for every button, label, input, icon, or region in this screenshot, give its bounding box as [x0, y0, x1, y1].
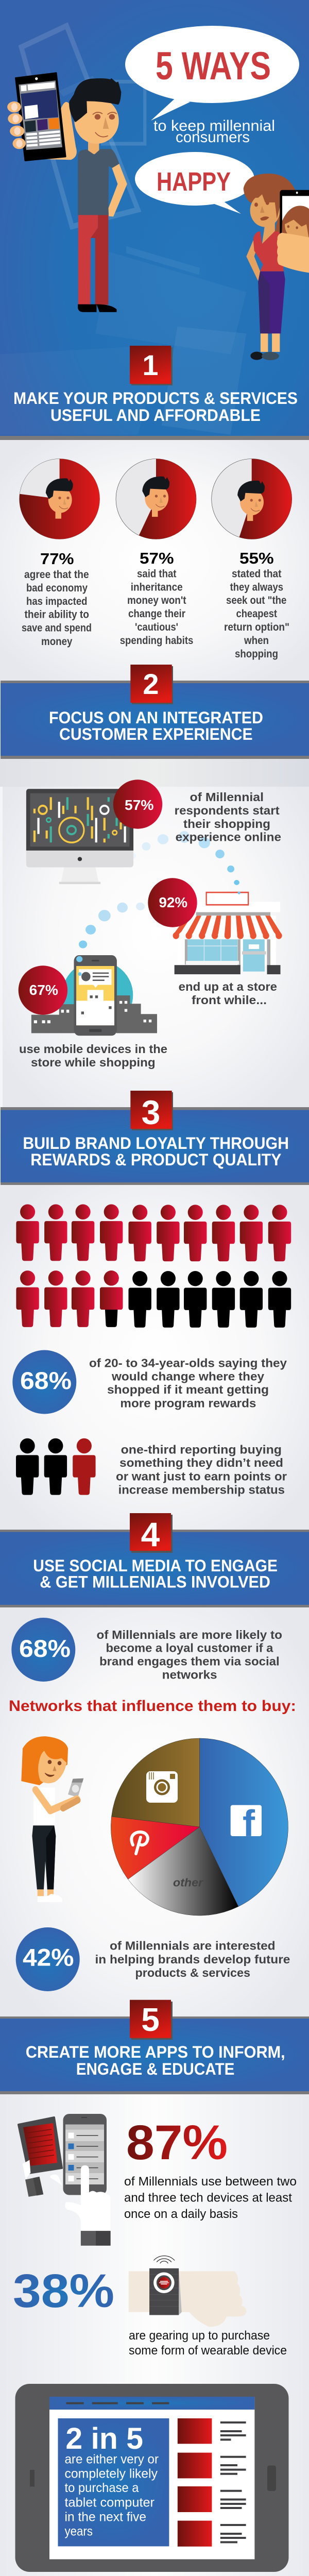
- text block: future products: [95, 1939, 290, 1979]
- stat circle: 57%: [113, 779, 162, 829]
- heading: step 1: USEFUL AND AFFORDABLE: [50, 406, 261, 425]
- text block: program rewards: of 20- to 34-year-olds saying they: [89, 1357, 287, 1370]
- stat circle: 42%: 42%: [23, 1944, 74, 1971]
- panel: step 2 customer journey: [0, 759, 309, 1107]
- text block: loyal customer: networks: [162, 1668, 217, 1682]
- text block: 77%: 77%: [40, 550, 74, 568]
- text block: 77%: [22, 550, 92, 648]
- text block: one-third: [116, 1443, 287, 1496]
- text block: 55%: [224, 549, 289, 660]
- badge: number 4: [130, 1513, 173, 1553]
- text block: tech devices: [124, 2175, 297, 2221]
- text block: one-third: or want just to earn points or: [116, 1470, 287, 1483]
- badge: number 5: [130, 2000, 173, 2040]
- text block: 55%: 55%: [239, 549, 274, 567]
- text block: program rewards: [89, 1357, 287, 1410]
- heading: step 5: ENGAGE & EDUCATE: [76, 2060, 234, 2078]
- heading: step 5: CREATE MORE APPS TO INFORM,: [26, 2043, 285, 2061]
- text block: tech devices: and three tech devices at least: [124, 2191, 292, 2205]
- text block: shopping online: experience online: [176, 831, 281, 844]
- text block: mobile devices: store while shopping: [31, 1056, 156, 1069]
- callout: 2 in 5: completely likely: [65, 2466, 158, 2481]
- text block: wearable device: are gearing up to purchase: [129, 2329, 270, 2343]
- illustration: smart watch on wrist: [129, 2256, 246, 2327]
- text block: 57%: 'cautious': [135, 621, 178, 633]
- statistic: 38%: 38%: [13, 2265, 114, 2317]
- heading: step 4: [33, 1556, 278, 1591]
- text block: one-third: something they didn’t need: [119, 1456, 283, 1469]
- text block: 77%: bad economy: [26, 582, 88, 594]
- speech bubble: happy: [135, 152, 254, 214]
- text block: shopping online: respondents start: [175, 804, 280, 817]
- heading: step 2: [49, 708, 263, 743]
- text block: 57%: change their: [128, 608, 185, 620]
- speech bubble: happy: HAPPY: [157, 167, 231, 196]
- text block: future products: products & services: [135, 1966, 250, 1979]
- pictogram: one third of people: [16, 1438, 96, 1495]
- icon: facebook: [231, 1803, 262, 1844]
- text block: 57%: inheritance: [131, 581, 183, 593]
- speech bubble: 5 ways: [125, 26, 299, 121]
- text block: 77%: their ability to: [25, 609, 89, 621]
- callout: 2 in 5: in the next five: [65, 2510, 146, 2524]
- stat circle: 68% rewards: 68%: [20, 1367, 72, 1394]
- panel: step 5 header: [0, 2000, 309, 2094]
- stat circle: 92%: 92%: [159, 894, 187, 910]
- text block: loyal customer: become a loyal customer if a: [106, 1641, 273, 1655]
- heading: step 3: BUILD BRAND LOYALTY THROUGH: [23, 1134, 289, 1153]
- text block: mobile devices: [19, 1042, 167, 1069]
- text block: shopping online: of Millennial: [190, 790, 264, 804]
- text block: 55%: seek out "the: [226, 595, 286, 606]
- subtitle: [153, 117, 275, 146]
- badge: number 1: 1: [142, 349, 159, 381]
- text block: program rewards: would change where they: [111, 1369, 264, 1383]
- heading: step 3: [23, 1134, 289, 1169]
- text block: loyal customer: of Millennials are more likely to: [97, 1628, 282, 1641]
- subtitle: consumers: [176, 129, 250, 146]
- text block: 55%: when: [244, 635, 269, 647]
- stat circle: 42%: [16, 1927, 80, 1991]
- icon: pinterest: [131, 1832, 148, 1854]
- text block: 57%: money won't: [127, 595, 186, 606]
- icon: desktop monitor: [26, 789, 133, 884]
- stat circle: 67%: 67%: [29, 982, 58, 998]
- illustration: tablet and phone with hands: [19, 2114, 111, 2246]
- stat circle: 92%: [148, 878, 197, 927]
- icon: instagram: [146, 1771, 178, 1803]
- text block: loyal customer: [97, 1628, 282, 1682]
- text block: shopping online: [175, 790, 281, 844]
- panel: step 3 loyalty statistics: [0, 1185, 309, 1530]
- text block: tech devices: of Millennials use between two: [124, 2175, 297, 2189]
- stat circle: 68% loyal: [11, 1618, 75, 1682]
- icon: mobile phone in city: [31, 955, 157, 1036]
- stat circle: 68% loyal: 68%: [19, 1635, 71, 1662]
- text block: mobile devices: use mobile devices in the: [19, 1042, 167, 1056]
- callout: 2 in 5: [58, 2418, 169, 2546]
- heading: step 2: FOCUS ON AN INTEGRATED: [49, 708, 263, 727]
- pictogram: 14 of 20 people: [16, 1205, 291, 1328]
- stat circle: 57%: 57%: [125, 797, 154, 813]
- pie chart: 77%: [20, 459, 100, 539]
- text block: 55%: return option": [224, 621, 289, 633]
- text block: 55%: stated that: [232, 568, 281, 580]
- text block: program rewards: more program rewards: [120, 1397, 256, 1410]
- badge: number 5: 5: [141, 2001, 160, 2038]
- text block: program rewards: shopped if it meant getting: [107, 1383, 269, 1396]
- text block: wearable device: some form of wearable device: [129, 2344, 287, 2358]
- badge: number 4: 4: [141, 1515, 160, 1553]
- panel: step 3 header: [1, 1091, 309, 1185]
- text block: wearable device: [129, 2329, 287, 2358]
- text block: loyal customer: brand engages them via social: [99, 1655, 280, 1668]
- text block: 57%: 57%: [140, 549, 174, 567]
- heading: step 4: USE SOCIAL MEDIA TO ENGAGE: [33, 1556, 278, 1575]
- badge: number 3: 3: [142, 1093, 160, 1131]
- icon: store front: [173, 891, 282, 974]
- panel: step 1 statistics: [0, 440, 309, 681]
- panel: step 5 apps statistics: [0, 2094, 309, 2576]
- badge: number 3: [130, 1091, 173, 1131]
- text block: store front: front while...: [192, 993, 267, 1007]
- illustration: tablet callout: [15, 2384, 288, 2572]
- pie chart: 57%: [116, 459, 196, 539]
- text block: 77%: has impacted: [26, 596, 88, 607]
- panel: step 4 header: [0, 1513, 309, 1607]
- heading: step 3: REWARDS & PRODUCT QUALITY: [30, 1150, 282, 1169]
- heading: step 4: & GET MILLENIALS INVOLVED: [40, 1573, 270, 1591]
- text block: 57%: said that: [137, 568, 176, 580]
- statistic: 87%: 87%: [126, 2115, 228, 2170]
- text block: one-third: increase membership status: [118, 1483, 285, 1496]
- badge: number 2: [130, 665, 173, 704]
- label: other: other: [173, 1876, 204, 1889]
- text block: 57%: spending habits: [120, 635, 193, 647]
- panel: hero header: [0, 0, 309, 436]
- panel: step 2 header: [1, 665, 309, 759]
- text block: store front: end up at a store: [179, 980, 277, 993]
- illustration: woman taking selfie: [244, 174, 309, 360]
- callout: 2 in 5: to purchase a: [65, 2481, 139, 2495]
- speech bubble: 5 ways: 5 WAYS: [156, 44, 271, 88]
- text block: 55%: shopping: [235, 648, 278, 660]
- heading: step 2: CUSTOMER EXPERIENCE: [59, 725, 253, 743]
- callout: 2 in 5: tablet computer: [65, 2496, 154, 2510]
- icon: facebook: f: [243, 1803, 255, 1844]
- badge: number 1: [130, 346, 173, 385]
- heading: step 1: [13, 389, 298, 425]
- callout: 2 in 5: years: [65, 2524, 93, 2539]
- dotted path: online to store: [130, 831, 239, 885]
- illustration: woman with phone: [21, 1736, 83, 1902]
- stat circle: 67%: [19, 965, 67, 1015]
- text block: 77%: agree that the: [24, 569, 89, 581]
- text block: one-third: one-third reporting buying: [121, 1443, 282, 1456]
- pie chart: social networks: [111, 1738, 288, 1916]
- text block: 55%: cheapest: [236, 608, 277, 620]
- panel: step 4 social statistics: [0, 1607, 309, 2016]
- text block: 57%: [120, 549, 193, 647]
- text block: future products: in helping brands develop future: [95, 1953, 290, 1966]
- text block: tech devices: once on a daily basis: [124, 2207, 238, 2221]
- text block: 77%: save and spend: [22, 622, 92, 634]
- text block: shopping online: their shopping: [183, 817, 270, 831]
- stat circle: 68% rewards: [12, 1350, 76, 1414]
- subtitle: to keep millennial: [153, 117, 275, 134]
- text block: 77%: money: [41, 636, 73, 648]
- heading: step 1: MAKE YOUR PRODUCTS & SERVICES: [13, 389, 298, 408]
- dotted path: store to mobile: [79, 903, 145, 948]
- callout: 2 in 5: 2 in 5: [65, 2422, 143, 2455]
- callout: 2 in 5: are either very or: [65, 2452, 159, 2467]
- text block: 55%: they always: [230, 581, 283, 593]
- heading: networks: Networks that influence them to buy:: [9, 1698, 296, 1715]
- text block: future products: of Millennials are interested: [110, 1939, 276, 1952]
- illustration: man holding phone: [7, 73, 127, 312]
- badge: number 2: 2: [143, 668, 159, 700]
- text block: store front: [179, 980, 277, 1007]
- pie chart: 55%: [212, 459, 292, 539]
- heading: step 5: [26, 2043, 285, 2078]
